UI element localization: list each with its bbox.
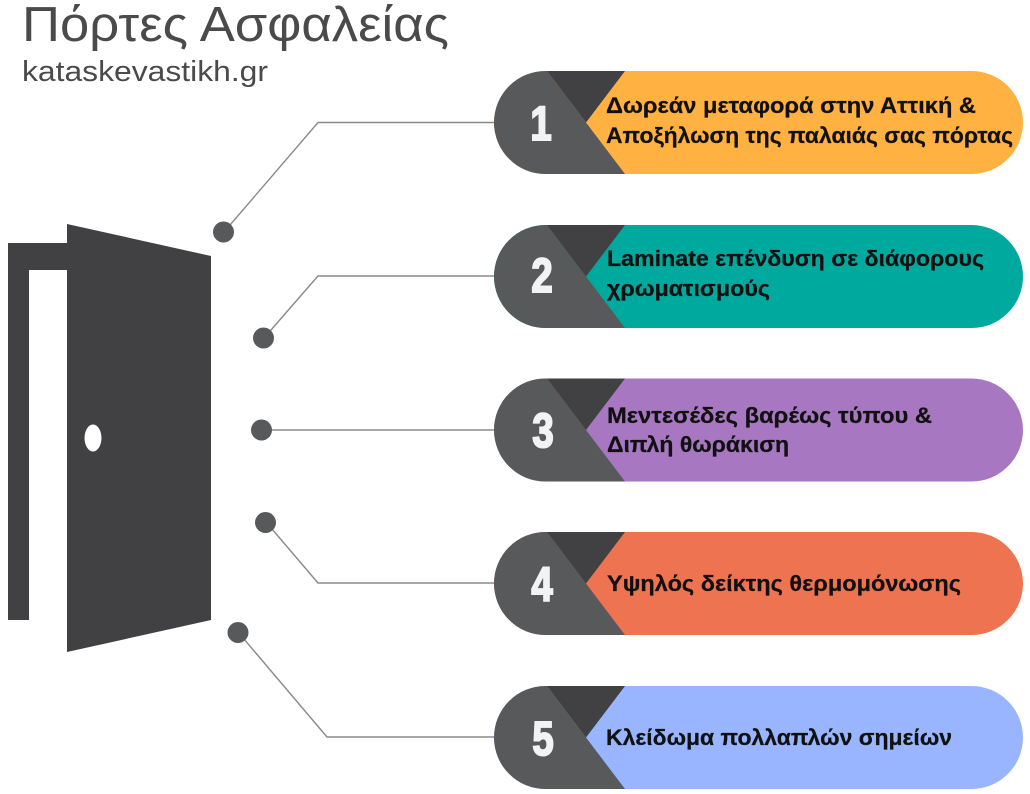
connector 2 (253, 276, 495, 348)
panel 4: thermal insulation: 4 (531, 559, 553, 612)
panel 5: multi-point locking: Κλείδωμα πολλαπλών σημείων (606, 725, 952, 750)
panel 3: hinges and armour (494, 378, 1023, 482)
panel 2: laminate: χρωματισμούς (607, 276, 770, 301)
panel 3: hinges and armour: Διπλή θωράκιση (607, 432, 789, 457)
panel 5: multi-point locking (494, 686, 1023, 789)
panel 3: hinges and armour: 3 (532, 405, 554, 458)
panel 3: hinges and armour: Μεντεσέδες βαρέως τύπου & (607, 403, 932, 428)
panel 2: laminate: Laminate επένδυση σε διάφορους (607, 246, 984, 271)
connector 5 (228, 622, 495, 737)
panel 1: free transport: 1 (530, 98, 552, 151)
connector 3 (251, 420, 495, 440)
panel 4: thermal insulation: Υψηλός δείκτης θερμομόνωσης (607, 571, 961, 596)
panel 4: thermal insulation (494, 532, 1023, 635)
panel 1: free transport: Αποξήλωση της παλαιάς σας πόρτας (606, 123, 1013, 148)
panel 1: free transport: Δωρεάν μεταφορά στην Αττική & (606, 93, 976, 118)
panel 5: multi-point locking: 5 (532, 713, 554, 766)
panel 1: free transport (494, 71, 1023, 174)
connector 4 (255, 512, 495, 583)
connector 1 (213, 122, 495, 242)
subtitle: website: kataskevastikh.gr (22, 56, 268, 88)
panel 2: laminate (494, 225, 1023, 328)
panel 2: laminate: 2 (531, 250, 553, 303)
icon: open door (8, 224, 211, 652)
